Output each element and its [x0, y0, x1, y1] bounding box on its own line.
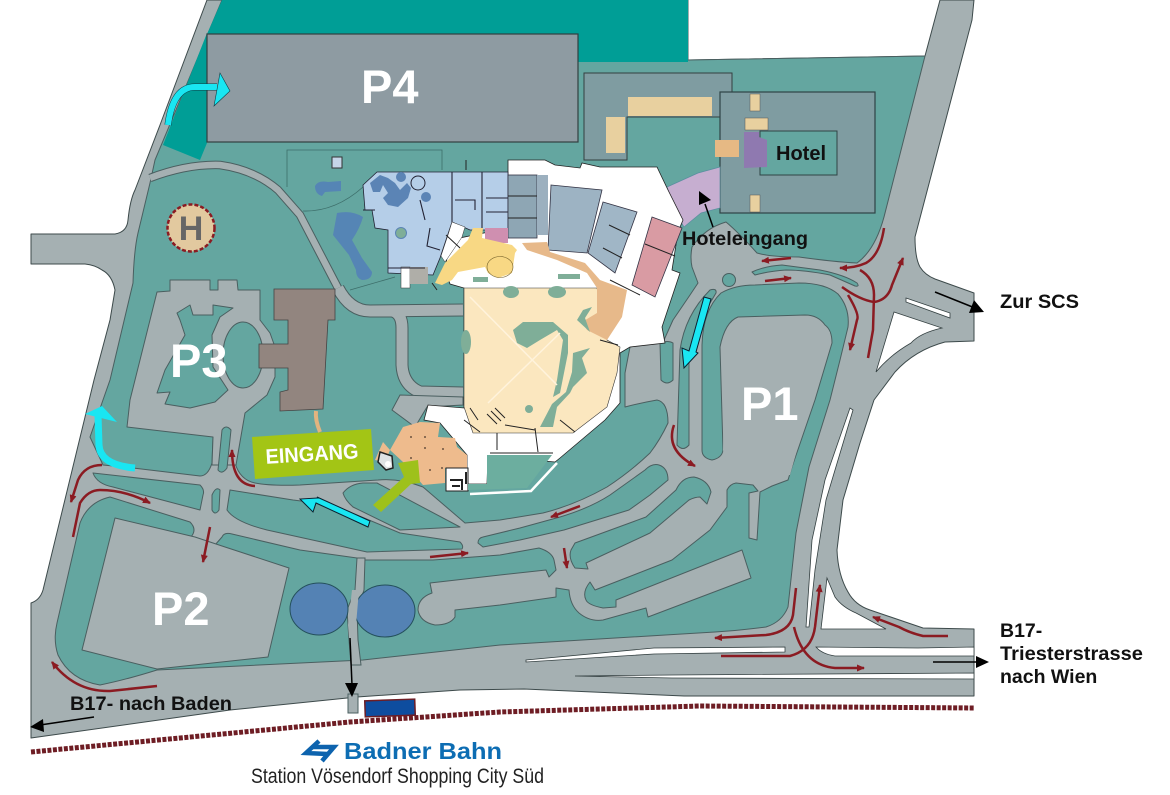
yellow plaza outline	[487, 256, 513, 278]
grey service block	[410, 267, 428, 284]
south terrace pool	[468, 455, 552, 490]
P3 parking	[127, 280, 275, 465]
mall wall details	[432, 160, 675, 453]
hotel courtyard	[760, 131, 837, 175]
arrow: to Wien	[933, 656, 989, 668]
P3 inner green	[157, 305, 233, 408]
black entrance block	[446, 468, 468, 491]
green island with parking rings P1 and P2	[55, 283, 848, 685]
upper band small pools	[473, 274, 580, 282]
pool small	[396, 172, 406, 182]
Badner Bahn wordmark: Badner Bahn	[344, 738, 502, 764]
cyan arrow to P4	[168, 73, 230, 125]
shopping mall building	[363, 160, 683, 494]
rail line	[31, 706, 975, 752]
hotel annex	[584, 73, 732, 160]
brown conference building	[259, 289, 335, 411]
teal wedge beside P4	[163, 33, 207, 160]
arrow: to Baden	[30, 717, 94, 732]
pool terrace white edge	[470, 463, 557, 494]
road network base	[31, 0, 974, 738]
label: B17 Triesterstrasse nach Wien: Triesterstrasse	[1000, 643, 1143, 665]
pool ring	[411, 176, 425, 190]
station stub	[348, 694, 358, 713]
EINGANG sign: EINGANG	[265, 440, 359, 469]
small entrance porch	[375, 442, 390, 462]
mall white base	[424, 160, 683, 484]
entrance revolving doors	[378, 452, 393, 470]
annex tan rooms	[606, 97, 712, 153]
pools	[370, 175, 411, 207]
road islands	[93, 265, 858, 569]
red traffic arrows	[52, 228, 948, 691]
north park lines	[287, 150, 442, 290]
white upper band patch	[458, 255, 595, 288]
footpath to station	[347, 558, 365, 665]
yellow plaza	[435, 228, 517, 285]
pool side	[421, 192, 431, 202]
pink shop	[485, 228, 508, 243]
label: B17 Triesterstrasse nach Wien	[1000, 620, 1143, 688]
teal overflow area top	[207, 0, 688, 62]
roundabout centre	[722, 274, 736, 286]
P3 ring hole	[223, 322, 263, 388]
pink hall	[632, 217, 682, 297]
grey halls	[508, 175, 537, 238]
beige dome area	[464, 288, 620, 433]
water park hall	[363, 172, 508, 275]
white service block	[401, 267, 410, 288]
courtyard road patch	[392, 395, 463, 427]
cyan arrow to B17	[300, 497, 370, 527]
label: Zur SCS: Zur SCS	[1000, 292, 1079, 313]
parking labels: P2	[152, 582, 210, 635]
tan footpath	[316, 411, 320, 432]
small pavilion	[332, 157, 342, 168]
whirlpool	[396, 228, 406, 238]
arrow: to SCS	[935, 292, 984, 313]
green grounds north of the access roads	[90, 0, 925, 523]
water park walls	[363, 172, 508, 268]
train	[365, 699, 415, 717]
hotel entrance plaza	[667, 167, 720, 227]
parking labels: P3	[170, 334, 228, 387]
entrance columns	[410, 436, 444, 471]
garden beds	[461, 286, 592, 427]
arrow: hotel entrance	[699, 191, 713, 227]
EINGANG sign	[252, 429, 374, 479]
parking P4	[207, 34, 578, 142]
parking labels	[152, 60, 798, 635]
P2 parking	[82, 518, 289, 669]
white corner	[441, 222, 465, 262]
station name: Station Vösendorf Shopping City Süd	[251, 765, 544, 788]
label: Hoteleingang: Hoteleingang	[682, 229, 808, 250]
orange mall corridor	[522, 242, 627, 340]
cyan arrow west	[85, 406, 135, 468]
road slits	[526, 298, 974, 679]
cyan arrow to P1	[682, 297, 711, 368]
P1 parking label surface	[723, 316, 830, 480]
green arrow to entrance	[373, 460, 420, 512]
north pond	[315, 181, 341, 196]
access road west	[150, 165, 463, 393]
hotel rooms	[715, 94, 768, 212]
Badner Bahn logo	[306, 741, 334, 761]
label: Hotel: Hotel	[776, 143, 826, 165]
footpath over ponds	[348, 590, 359, 660]
lake	[333, 212, 372, 280]
ponds	[290, 583, 415, 637]
parking labels: P4	[361, 60, 418, 113]
hotel block	[720, 92, 875, 213]
arrow: to station	[345, 638, 358, 697]
label: B17 Triesterstrasse nach Wien: nach Wien	[1000, 666, 1097, 688]
label: B17 Triesterstrasse nach Wien: B17-	[1000, 620, 1042, 642]
label: B17 nach Baden: B17- nach Baden	[70, 694, 232, 715]
heliport	[168, 204, 214, 252]
heliport: H	[179, 210, 203, 248]
dome path lines	[470, 297, 560, 403]
south entrance orange hall	[390, 422, 467, 485]
parking labels: P1	[741, 377, 798, 430]
